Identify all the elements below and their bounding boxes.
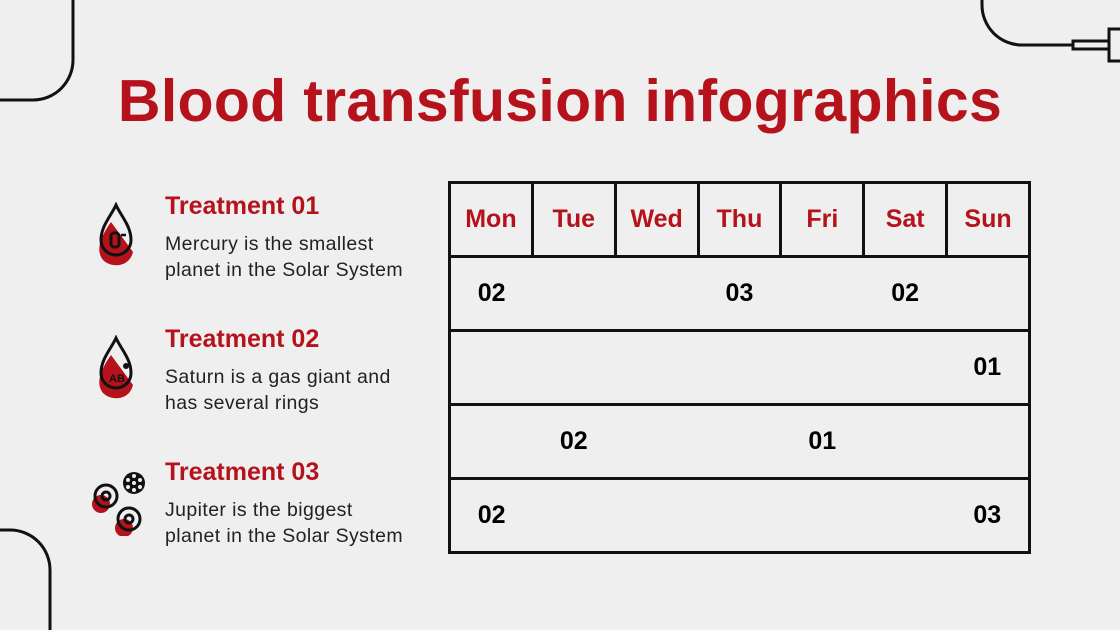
- icon: blood cells: [92, 472, 145, 536]
- icon: blood drop O-: [99, 202, 133, 266]
- icon: blood drop AB: AB: [109, 373, 125, 385]
- schedule table: Tue: [552, 205, 595, 233]
- text: treatment 01: Mercury is the smallest planet in the Solar System: [165, 233, 403, 281]
- text: treatment 02: Saturn is a gas giant and has several rings: [165, 366, 391, 414]
- text: treatment 01: Treatment 01: [165, 192, 319, 220]
- title: Blood transfusion infographics: [118, 68, 1002, 134]
- text: treatment 03: [165, 458, 403, 547]
- icon: blood drop AB: [99, 335, 133, 398]
- schedule table: [448, 181, 1031, 554]
- schedule table: Sun: [964, 205, 1012, 233]
- schedule table: 02: [560, 427, 588, 455]
- schedule table: 01: [973, 353, 1001, 381]
- schedule table: 01: [808, 427, 836, 455]
- text: treatment 03: Treatment 03: [165, 458, 319, 486]
- schedule table: Wed: [630, 205, 683, 233]
- schedule table: 02: [478, 501, 506, 529]
- schedule table: 02: [478, 279, 506, 307]
- schedule table: Thu: [717, 205, 762, 233]
- schedule table: 03: [973, 501, 1001, 529]
- schedule table: Fri: [806, 205, 838, 233]
- text: treatment 02: [165, 325, 391, 414]
- schedule table: Mon: [465, 205, 517, 233]
- schedule table: Sat: [886, 205, 925, 233]
- text: treatment 02: Treatment 02: [165, 325, 319, 353]
- text: treatment 03: Jupiter is the biggest planet in the Solar System: [165, 499, 403, 547]
- schedule table: 03: [726, 279, 753, 307]
- schedule table: 02: [891, 279, 919, 307]
- text: treatment 01: [165, 192, 403, 281]
